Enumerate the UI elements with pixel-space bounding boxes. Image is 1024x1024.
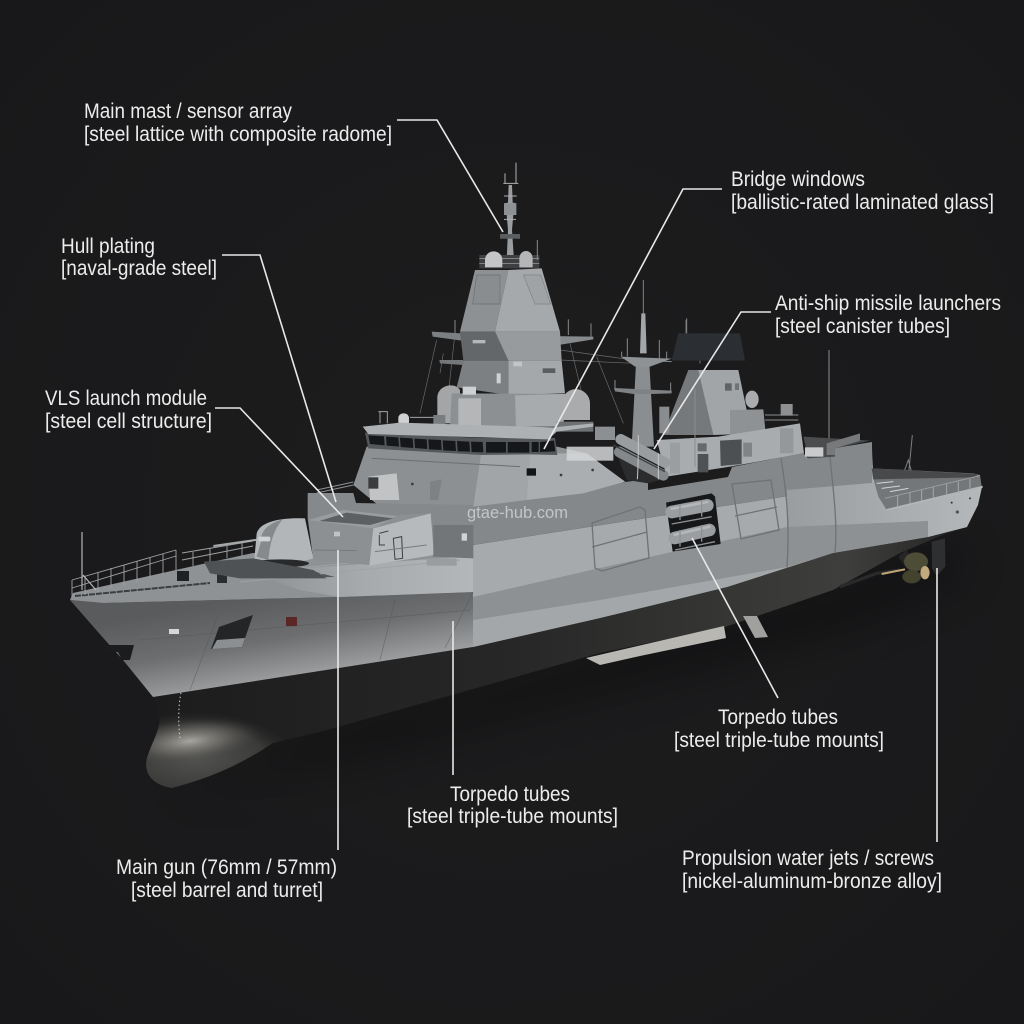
hawse opening <box>211 615 253 649</box>
leader: hull plating <box>222 255 336 502</box>
label: torpedo tubes centre: [steel triple-tube mounts] <box>407 805 618 828</box>
bridge block <box>353 423 625 507</box>
flight deck <box>872 468 983 514</box>
VLS module and gun <box>204 482 473 578</box>
bow railing <box>72 532 460 598</box>
fore mast and tower <box>378 163 672 432</box>
label: propulsion: Propulsion water jets / screws <box>682 847 934 870</box>
label: hull plating: Hull plating <box>61 235 155 258</box>
label: anti-ship missile launchers: Anti-ship missile launchers <box>775 292 1001 315</box>
hull side aft <box>473 442 982 647</box>
label: anti-ship missile launchers: [steel canister tubes] <box>775 315 950 338</box>
leader: main gun <box>337 550 339 850</box>
label: torpedo tubes centre: Torpedo tubes <box>450 783 570 806</box>
aft quarter <box>787 442 982 537</box>
middle light band <box>473 483 928 597</box>
aft deckhouse <box>657 388 804 477</box>
dark radar housing <box>672 333 745 361</box>
sensor domes <box>479 251 539 268</box>
rigging wires <box>420 333 633 423</box>
label: propulsion <box>682 847 942 893</box>
label: bridge windows: Bridge windows <box>731 168 865 191</box>
label: hull plating: [naval-grade steel] <box>61 257 217 280</box>
label: bridge windows: [ballistic-rated laminated glass] <box>731 191 994 214</box>
lower strip aft <box>787 521 928 567</box>
lower hull <box>146 527 970 788</box>
panel doors <box>592 448 836 571</box>
tower base and domes <box>378 385 593 432</box>
propeller and rudder <box>840 538 945 587</box>
VLS block <box>308 510 434 566</box>
gun base <box>204 558 327 578</box>
bulbous bow <box>146 718 274 788</box>
label: torpedo tubes right: Torpedo tubes <box>718 706 838 729</box>
hull emblem <box>286 617 297 626</box>
label: hull plating <box>61 235 217 280</box>
label: VLS launch module <box>45 387 212 433</box>
aft radar tower <box>659 320 766 435</box>
anchor <box>105 645 134 660</box>
label: torpedo tubes right: [steel triple-tube mounts] <box>674 729 884 752</box>
label: propulsion: [nickel-aluminum-bronze alloy] <box>682 870 942 893</box>
bridge window frame <box>365 433 557 455</box>
leader: anti-ship missile launchers <box>654 312 771 449</box>
label: main mast <box>84 100 392 146</box>
aft deck equipment <box>803 433 913 478</box>
foredeck <box>70 532 473 603</box>
weapon station <box>368 473 399 500</box>
watermark: gtae-hub.com <box>467 503 568 522</box>
label: main gun: [steel barrel and turret] <box>131 879 323 902</box>
aft superstructure <box>657 320 829 477</box>
label: VLS launch module: [steel cell structure] <box>45 410 212 433</box>
gun turret <box>213 518 313 567</box>
leader: main mast <box>397 120 503 232</box>
missile launchers <box>613 435 665 483</box>
leader: torpedo tubes centre <box>452 621 454 775</box>
radar tower <box>457 268 565 395</box>
plinth railing <box>317 482 353 493</box>
leader: VLS launch module <box>215 408 343 517</box>
label: bridge windows <box>731 168 994 214</box>
label: main gun <box>116 856 337 902</box>
rear plinth <box>308 493 473 565</box>
bridge windows band <box>368 435 555 453</box>
midship stair block <box>427 525 473 566</box>
label: torpedo tubes centre <box>407 783 618 828</box>
VLS deck <box>308 510 397 528</box>
bridge roof <box>363 423 593 439</box>
boot strake <box>473 553 833 647</box>
label: main mast: [steel lattice with composite radome] <box>84 123 392 146</box>
leader: torpedo tubes right <box>692 538 778 698</box>
ship illustration <box>70 163 983 804</box>
stabilizer fins <box>586 616 768 665</box>
main mast <box>500 163 520 260</box>
label: torpedo tubes right <box>674 706 884 752</box>
second mast <box>614 280 687 447</box>
leader: bridge windows <box>544 189 722 449</box>
label: anti-ship missile launchers <box>775 292 1001 338</box>
label: main mast: Main mast / sensor array <box>84 100 292 123</box>
aft mast antenna <box>827 350 831 443</box>
label: VLS launch module: VLS launch module <box>45 387 207 410</box>
leader: propulsion <box>936 568 938 842</box>
lower strake <box>473 495 967 647</box>
tower arms <box>432 240 672 365</box>
torpedo bay <box>666 493 721 552</box>
ship shadow <box>170 550 960 790</box>
label: main gun: Main gun (76mm / 57mm) <box>116 856 337 879</box>
ornate deck equipment <box>567 447 613 461</box>
top dark band <box>473 442 872 545</box>
forward hull side <box>70 592 473 697</box>
boot seam dots <box>179 685 183 738</box>
